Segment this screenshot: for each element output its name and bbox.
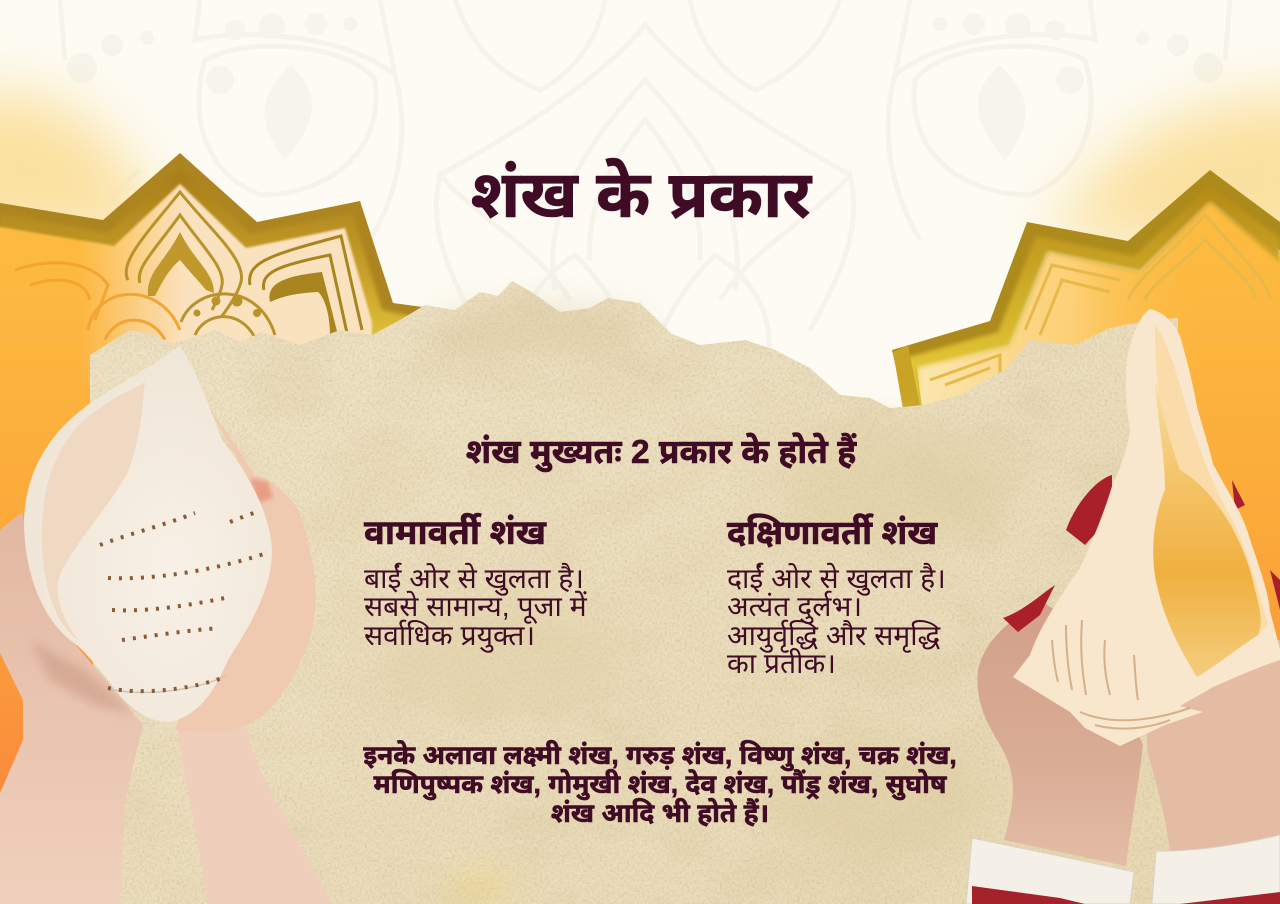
conch upper hood [1155,325,1268,635]
title: शंख के प्रकार [471,157,812,231]
text: other conch types: शंख आदि भी होते हैं। [551,797,769,828]
bangle: right wrist [1152,835,1280,904]
palm shadow [30,640,135,715]
shell spot rows [100,511,270,691]
petal outlines [930,215,1270,395]
photo: right hands holding conch [966,309,1280,904]
panel: torn paper [90,281,1178,904]
gold mandala frame: left [0,153,430,395]
column: dakshinavarti [727,513,946,679]
text: other conch types [363,739,957,828]
watercolor wash: top right [1040,97,1280,260]
text: dakshinavarti description: आयुर्वृद्धि और समृद्धि [727,619,941,653]
back hand [1147,640,1280,852]
red bangle: right wrist [1180,892,1280,904]
conch aperture [1153,380,1261,677]
text: dakshinavarti description: अत्यंत दुर्लभ। [727,590,862,625]
column: vamavarti [364,513,588,653]
text: vamavarti description: बाईं ओर से खुलता है। [364,562,584,596]
red bangle: left wrist [972,886,1085,904]
orange petal: lower left rosette [15,263,180,340]
photo: left hands holding shell [0,345,332,904]
heading: two types: शंख मुख्यतः 2 प्रकार के होते हैं [466,432,857,473]
text: dakshinavarti description: दाईं ओर से खुलता है। [727,562,946,596]
front hand and arm [977,600,1143,866]
text: vamavarti description: सबसे सामान्य, पूजा में [364,590,588,624]
right palm [175,405,316,733]
text: vamavarti description [364,562,588,653]
watercolor wash: top left [0,93,170,240]
paper shading blotches [370,308,1020,902]
orange mandala field: right [1150,260,1280,800]
heading: dakshinavarti: दक्षिणावर्ती शंख [727,513,938,552]
bangle: left wrist [966,838,1134,904]
background: faint central mandala [436,0,854,400]
text: dakshinavarti description: का प्रतीक। [727,647,836,679]
shell band at base [105,676,226,692]
text: vamavarti description: सर्वाधिक प्रयुक्त। [364,619,535,653]
gold petal: right [250,236,362,336]
gold petal: centre [126,192,242,316]
gold mandala frame: right [892,170,1280,440]
shell aperture [42,382,145,640]
heading: vamavarti: वामावर्ती शंख [364,513,547,552]
gold highlight: left tip [893,345,920,409]
text: other conch types: इनके अलावा लक्ष्मी शंख, गरुड़ शंख, विष्णु शंख, चक्र शंख, [363,739,957,771]
gold petal: lower rosette [181,294,275,338]
background: faint left mandala [60,0,402,300]
background: faint right mandala [888,0,1230,240]
conch shell: cream [1013,309,1280,746]
conch shell: white [24,345,272,722]
fingertip blush [250,478,273,503]
text: other conch types: मणिपुष्पक शंख, गोमुखी शंख, देव शंख, पौंड्र शंख, सुघोष [373,768,947,800]
orange mandala field: left [0,205,110,800]
red painted fingers [1003,475,1280,632]
left forearm and hand [0,512,143,904]
conch ribs [1052,620,1190,729]
right forearm [177,725,332,904]
text: dakshinavarti description [727,562,946,679]
